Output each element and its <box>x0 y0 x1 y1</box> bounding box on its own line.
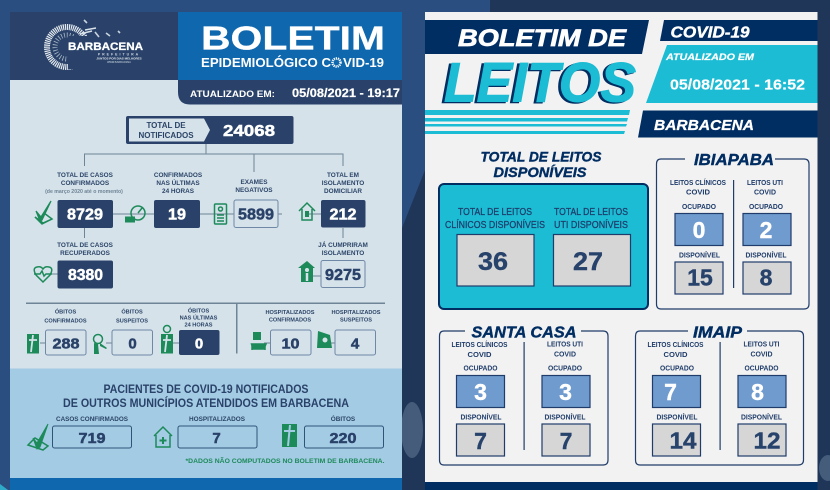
stat: total em isolamento domiciliar: 212 <box>330 206 357 224</box>
panel: total de leitos <box>439 184 648 309</box>
ibiapaba ICU: 8 <box>760 264 773 290</box>
header: boletim epidemiológico covid-19 <box>178 12 402 80</box>
stat: óbitos confirmados: CONFIRMADOS <box>44 318 87 324</box>
imaip clinical <box>648 340 704 456</box>
santa casa clinical: DISPONÍVEL <box>460 412 502 422</box>
stat: óbitos suspeitos: 0 <box>128 336 137 352</box>
heading: total de leitos disponíveis: DISPONÍVEIS <box>494 164 587 180</box>
banner: atualizado em: 05/08/2021 - 16:52 <box>670 76 805 94</box>
stat: total de casos confirmados: CONFIRMADOS <box>61 180 110 187</box>
banner: covid-19: COVID-19 <box>670 24 750 42</box>
banner: atualizado em: ATUALIZADO EM <box>665 52 755 63</box>
logo: Barbacena prefeitura: WWW.BARBACENA <box>107 61 131 64</box>
ibiapaba clinical: 15 <box>687 264 713 290</box>
imaip clinical: COVID <box>664 350 688 359</box>
clinical beds <box>445 206 545 286</box>
ICU beds: UTI DISPONÍVEIS <box>554 218 628 231</box>
logo: Barbacena prefeitura <box>10 12 178 80</box>
stat: óbitos suspeitos: SUSPEITOS <box>116 318 148 324</box>
stat: exames negativos <box>214 179 278 228</box>
stat: óbitos: 220 <box>330 430 356 447</box>
santa casa ICU: DISPONÍVEL <box>544 412 586 422</box>
imaip ICU: LEITOS UTI <box>744 340 780 348</box>
santa casa ICU <box>542 340 590 456</box>
imaip clinical: OCUPADO <box>660 364 694 372</box>
stat: confirmados nas últimas 24 horas: 19 <box>168 206 186 224</box>
stat: confirmados nas últimas 24 horas <box>125 172 203 228</box>
stat: total de casos recuperados: TOTAL DE CASOS <box>57 242 114 249</box>
banner: atualizado em <box>646 45 818 103</box>
santa casa clinical: 7 <box>474 428 487 454</box>
stat: óbitos suspeitos <box>94 308 152 355</box>
logo: Barbacena prefeitura: JUNTOS POR DIAS MELHORES <box>96 56 142 60</box>
stat: total em isolamento domiciliar: DOMICILIAR <box>324 188 362 195</box>
panel: imaip: IMAIP <box>693 324 742 342</box>
banner: covid-19 <box>660 20 818 42</box>
stat: óbitos confirmados: 288 <box>52 336 80 352</box>
santa casa clinical: COVID <box>468 350 492 359</box>
stat: hospitalizados: HOSPITALIZADOS <box>189 416 246 423</box>
stat: óbitos nas últimas 24 horas: ÓBITOS <box>188 306 209 314</box>
imaip ICU: 12 <box>754 428 780 454</box>
stat: total em isolamento domiciliar <box>299 172 366 228</box>
stat: hospitalizados confirmados <box>252 310 315 355</box>
update strip: 05/08/2021 - 19:17 <box>292 88 400 100</box>
stat: total de casos recuperados <box>34 242 114 288</box>
panel: santa casa: SANTA CASA <box>472 324 576 342</box>
panel: imaip <box>636 324 804 465</box>
stat: casos confirmados <box>28 416 132 450</box>
stat: óbitos nas últimas 24 horas: 24 HORAS <box>185 322 213 328</box>
stat: total de casos recuperados: RECUPERADOS <box>60 250 111 257</box>
imaip ICU: 8 <box>751 379 764 405</box>
stat: hospitalizados suspeitos: 4 <box>351 336 360 352</box>
total de notificados <box>126 116 294 144</box>
stat: confirmados nas últimas 24 horas: 24 HORAS <box>162 188 195 195</box>
panel: pacientes de outros municípios <box>10 368 402 478</box>
panel: ibiapaba: IBIAPABA <box>694 152 774 169</box>
stat: casos confirmados: CASOS CONFIRMADOS <box>56 416 129 423</box>
clinical beds: CLÍNICOS DISPONÍVEIS <box>445 218 545 231</box>
clinical beds: 36 <box>478 248 508 276</box>
clinical beds: TOTAL DE LEITOS <box>458 206 532 218</box>
total de notificados: NOTIFICADOS <box>138 131 194 140</box>
ICU beds: 27 <box>573 248 603 276</box>
stat: hospitalizados confirmados: 10 <box>282 336 300 352</box>
banner: boletim de: BOLETIM DE <box>458 25 627 52</box>
ICU beds <box>554 206 630 286</box>
panel: santa casa <box>440 324 608 465</box>
stat: hospitalizados suspeitos: SUSPEITOS <box>340 318 372 324</box>
imaip clinical: 14 <box>670 428 697 454</box>
update strip <box>178 80 402 104</box>
santa casa ICU: OCUPADO <box>548 364 582 372</box>
stat: já cumpriram isolamento <box>298 240 368 288</box>
imaip ICU: OCUPADO <box>744 364 779 372</box>
stat: total de casos confirmados: 8729 <box>67 206 103 224</box>
santa casa ICU: LEITOS UTI <box>547 340 583 348</box>
ibiapaba ICU: OCUPADO <box>749 202 783 211</box>
heading: total de leitos disponíveis: TOTAL DE LEITOS <box>480 148 602 164</box>
stat: óbitos confirmados <box>27 308 87 355</box>
stat: total em isolamento domiciliar: TOTAL EM <box>327 172 359 179</box>
update strip: ATUALIZADO EM: <box>190 89 275 100</box>
ibiapaba ICU: 2 <box>760 217 772 243</box>
santa casa clinical: 3 <box>474 379 487 405</box>
stat: confirmados nas últimas 24 horas: CONFIRMADOS <box>154 172 203 179</box>
stat: total de casos confirmados <box>35 172 123 228</box>
panel: boletim epidemiológico <box>10 12 402 490</box>
stat: óbitos <box>282 414 384 448</box>
ICU beds: TOTAL DE LEITOS <box>554 206 628 218</box>
stat: total de casos confirmados: TOTAL DE CASOS <box>57 172 114 179</box>
heading: pacientes: DE OUTROS MUNICÍPIOS ATENDIDOS EM BARBACENA <box>63 397 349 410</box>
stat: exames negativos: 5899 <box>238 206 274 224</box>
note: dados não computados: *DADOS NÃO COMPUTADOS NO BOLETIM DE BARBACENA. <box>186 458 385 465</box>
stat: já cumpriram isolamento: ISOLAMENTO <box>322 250 364 257</box>
imaip ICU <box>738 340 786 456</box>
ibiapaba ICU: COVID <box>754 188 777 196</box>
panel: ibiapaba <box>656 152 809 309</box>
santa casa ICU: 7 <box>560 428 572 454</box>
stat: casos confirmados: 719 <box>78 430 106 447</box>
stat: total de casos confirmados: (de março 2020 até o momento) <box>45 189 123 195</box>
imaip ICU: DISPONÍVEL <box>741 412 782 422</box>
total de notificados: TOTAL DE <box>146 121 186 130</box>
header: boletim epidemiológico covid-19: EPIDEMIOLÓGICO C <box>201 55 332 70</box>
ibiapaba clinical: OCUPADO <box>682 202 716 211</box>
logo: Barbacena prefeitura: PREFEITURA <box>98 52 140 56</box>
imaip ICU: COVID <box>750 350 773 358</box>
stat: exames negativos: EXAMES <box>240 179 268 186</box>
banner: barbacena <box>638 110 818 138</box>
ibiapaba clinical: COVID <box>686 188 711 196</box>
santa casa ICU: COVID <box>554 350 577 358</box>
stat: óbitos nas últimas 24 horas: NAS ÚLTIMAS <box>180 314 218 322</box>
santa casa clinical: LEITOS CLÍNICOS <box>452 340 508 349</box>
stat: hospitalizados confirmados: CONFIRMADOS <box>269 318 311 324</box>
stat: já cumpriram isolamento: JÁ CUMPRIRAM <box>318 240 368 249</box>
heading: pacientes: PACIENTES DE COVID-19 NOTIFICADOS <box>104 384 309 396</box>
stat: hospitalizados: 7 <box>212 430 221 447</box>
stat: hospitalizados suspeitos: HOSPITALIZADOS <box>332 310 381 316</box>
banner: barbacena: BARBACENA <box>654 117 754 134</box>
header: boletim epidemiológico covid-19: BOLETIM <box>201 20 385 58</box>
ibiapaba clinical: DISPONÍVEL <box>679 250 720 260</box>
stat: total em isolamento domiciliar: ISOLAMENTO <box>322 180 364 187</box>
ibiapaba ICU <box>743 178 791 294</box>
stat: óbitos confirmados: ÓBITOS <box>55 308 76 316</box>
heading: pacientes <box>63 384 349 410</box>
ibiapaba ICU: LEITOS UTI <box>747 178 783 187</box>
header: boletim epidemiológico covid-19: VID-19 <box>343 55 384 70</box>
ibiapaba ICU: DISPONÍVEL <box>746 250 787 260</box>
logo: Barbacena prefeitura: BARBACENA <box>68 41 143 53</box>
stat: óbitos nas últimas 24 horas <box>161 306 220 355</box>
stat: hospitalizados suspeitos <box>317 310 381 355</box>
stat: confirmados nas últimas 24 horas: NAS ÚLTIMAS <box>156 178 200 187</box>
panel: boletim de leitos <box>425 12 818 490</box>
stat: hospitalizados confirmados: HOSPITALIZADOS <box>266 310 315 316</box>
imaip clinical: LEITOS CLÍNICOS <box>648 340 704 349</box>
santa casa clinical: OCUPADO <box>464 364 498 372</box>
imaip clinical: 7 <box>664 379 677 405</box>
stat: hospitalizados <box>154 416 257 448</box>
stat: exames negativos: NEGATIVOS <box>235 187 273 194</box>
stat: óbitos nas últimas 24 horas: 0 <box>195 336 203 352</box>
stat: total de casos recuperados: 8380 <box>68 267 103 284</box>
stat: já cumpriram isolamento: 9275 <box>325 267 361 284</box>
imaip clinical: DISPONÍVEL <box>656 412 698 422</box>
ibiapaba clinical <box>670 178 726 294</box>
title: leitos: LEITOS <box>444 50 636 114</box>
santa casa clinical <box>452 340 508 456</box>
stat: óbitos: ÓBITOS <box>331 414 356 423</box>
ibiapaba clinical: 0 <box>693 217 705 243</box>
ibiapaba clinical: LEITOS CLÍNICOS <box>670 178 726 187</box>
title: leitos: LEITOS <box>442 52 634 114</box>
santa casa ICU: 3 <box>559 379 572 405</box>
stripes <box>425 110 630 134</box>
heading: total de leitos disponíveis <box>480 148 602 180</box>
total de notificados: 24068 <box>223 123 275 140</box>
banner: boletim de <box>425 20 649 54</box>
stat: óbitos suspeitos: ÓBITOS <box>121 308 143 316</box>
